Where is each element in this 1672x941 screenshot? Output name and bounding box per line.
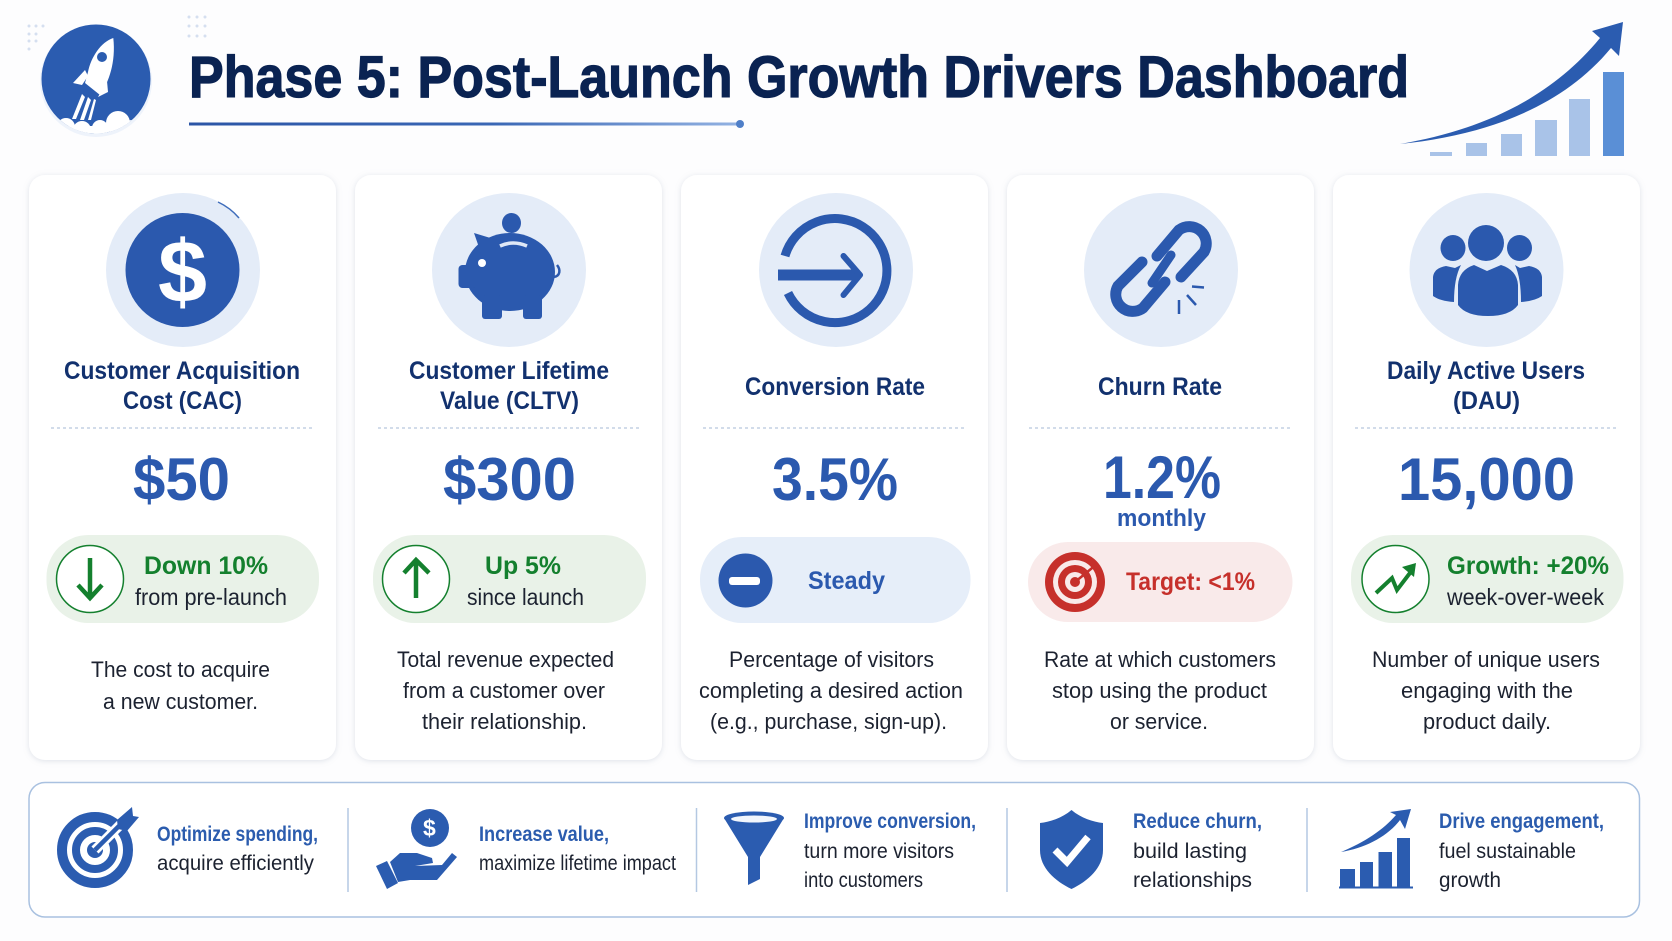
icon: piggy bank bbox=[432, 193, 586, 347]
heading: Customer Lifetime bbox=[409, 357, 609, 385]
icon: hand with coin bbox=[376, 809, 457, 889]
description: engaging with the bbox=[1401, 678, 1573, 703]
description bbox=[397, 647, 614, 734]
description: from a customer over bbox=[403, 678, 605, 703]
description: Percentage of visitors bbox=[729, 647, 934, 672]
description: Number of unique users bbox=[1372, 647, 1600, 672]
text: improve conversion bbox=[804, 810, 976, 892]
text: increase value bbox=[479, 823, 676, 875]
text: increase value: maximize lifetime impact bbox=[479, 851, 676, 875]
heading: Cost (CAC) bbox=[123, 387, 242, 415]
panel: churn rate bbox=[1007, 175, 1314, 760]
heading: Conversion Rate bbox=[745, 373, 925, 401]
status pill bbox=[1351, 535, 1624, 623]
icon: hand with coin: $ bbox=[423, 815, 436, 841]
status pill bbox=[46, 535, 319, 623]
title underline bbox=[189, 120, 744, 128]
description: Rate at which customers bbox=[1044, 647, 1276, 672]
icon: broken chain bbox=[1084, 193, 1238, 347]
text: reduce churn: relationships bbox=[1133, 868, 1252, 892]
description: a new customer. bbox=[103, 689, 258, 714]
value: $50 bbox=[133, 446, 230, 513]
title: Phase 5: Post-Launch Growth Drivers Dashboard bbox=[189, 45, 1409, 110]
text: drive engagement: growth bbox=[1439, 868, 1501, 892]
heading: Daily Active Users bbox=[1387, 357, 1585, 385]
description bbox=[699, 647, 963, 734]
text: optimize spending bbox=[157, 823, 318, 875]
status pill: Steady bbox=[808, 567, 885, 595]
panel: customer acquisition cost bbox=[29, 175, 336, 760]
description: stop using the product bbox=[1052, 678, 1268, 703]
description: completing a desired action bbox=[699, 678, 963, 703]
status pill: since launch bbox=[467, 584, 584, 610]
panel: customer lifetime value bbox=[355, 175, 662, 760]
text: increase value: Increase value, bbox=[479, 823, 609, 846]
value: monthly bbox=[1117, 505, 1207, 532]
text: drive engagement: Drive engagement, bbox=[1439, 810, 1604, 833]
status pill bbox=[1028, 542, 1292, 622]
description: their relationship. bbox=[422, 709, 587, 734]
text: drive engagement: fuel sustainable bbox=[1439, 839, 1576, 863]
text: optimize spending: Optimize spending, bbox=[157, 823, 318, 846]
description bbox=[91, 657, 270, 714]
icon: shield with check bbox=[1040, 810, 1103, 889]
text: reduce churn bbox=[1133, 810, 1262, 892]
icon: dollar coin: $ bbox=[158, 222, 207, 321]
growth chart with arrow bbox=[1400, 22, 1624, 156]
text: reduce churn: Reduce churn, bbox=[1133, 810, 1262, 833]
description bbox=[1372, 647, 1600, 734]
status pill bbox=[373, 535, 646, 623]
heading bbox=[409, 357, 609, 415]
status pill: Target: <1% bbox=[1126, 568, 1255, 596]
status pill: Growth: +20% bbox=[1447, 552, 1609, 580]
icon: target with arrow bbox=[62, 807, 139, 883]
value: 15,000 bbox=[1398, 446, 1575, 513]
heading: (DAU) bbox=[1453, 387, 1520, 415]
description: (e.g., purchase, sign-up). bbox=[710, 709, 947, 734]
description: Total revenue expected bbox=[397, 647, 614, 672]
heading: Customer Acquisition bbox=[64, 357, 300, 385]
value: $300 bbox=[443, 446, 576, 513]
text: drive engagement bbox=[1439, 810, 1604, 892]
heading bbox=[64, 357, 300, 415]
text: optimize spending: acquire efficiently bbox=[157, 851, 314, 875]
value: 3.5% bbox=[772, 446, 898, 513]
description: The cost to acquire bbox=[91, 657, 270, 682]
heading: Churn Rate bbox=[1098, 373, 1222, 401]
text: improve conversion: Improve conversion, bbox=[804, 810, 976, 833]
text: improve conversion: turn more visitors bbox=[804, 839, 954, 863]
status pill: Down 10% bbox=[144, 552, 268, 580]
text: reduce churn: build lasting bbox=[1133, 839, 1247, 863]
status pill bbox=[700, 537, 970, 623]
heading: Value (CLTV) bbox=[440, 387, 579, 415]
icon: funnel bbox=[724, 812, 784, 885]
heading bbox=[1387, 357, 1585, 415]
panel: daily active users bbox=[1333, 175, 1640, 760]
text: improve conversion: into customers bbox=[804, 868, 923, 892]
value: 1.2% bbox=[1103, 444, 1221, 511]
description: or service. bbox=[1110, 709, 1208, 734]
status pill: from pre-launch bbox=[135, 584, 287, 610]
icon: dollar coin bbox=[106, 193, 260, 347]
panel: action strip bbox=[29, 782, 1640, 917]
decorative dots bbox=[28, 16, 206, 50]
icon: arrow entering circle bbox=[759, 193, 913, 347]
icon: group of people bbox=[1410, 193, 1564, 347]
panel: conversion rate bbox=[681, 175, 988, 760]
description: product daily. bbox=[1423, 709, 1551, 734]
description bbox=[1044, 647, 1276, 734]
value bbox=[1103, 444, 1221, 532]
status pill: week-over-week bbox=[1446, 584, 1604, 610]
status pill: Up 5% bbox=[485, 552, 561, 580]
icon: rocket badge bbox=[40, 24, 152, 140]
icon: bars with arrow bbox=[1339, 809, 1413, 888]
